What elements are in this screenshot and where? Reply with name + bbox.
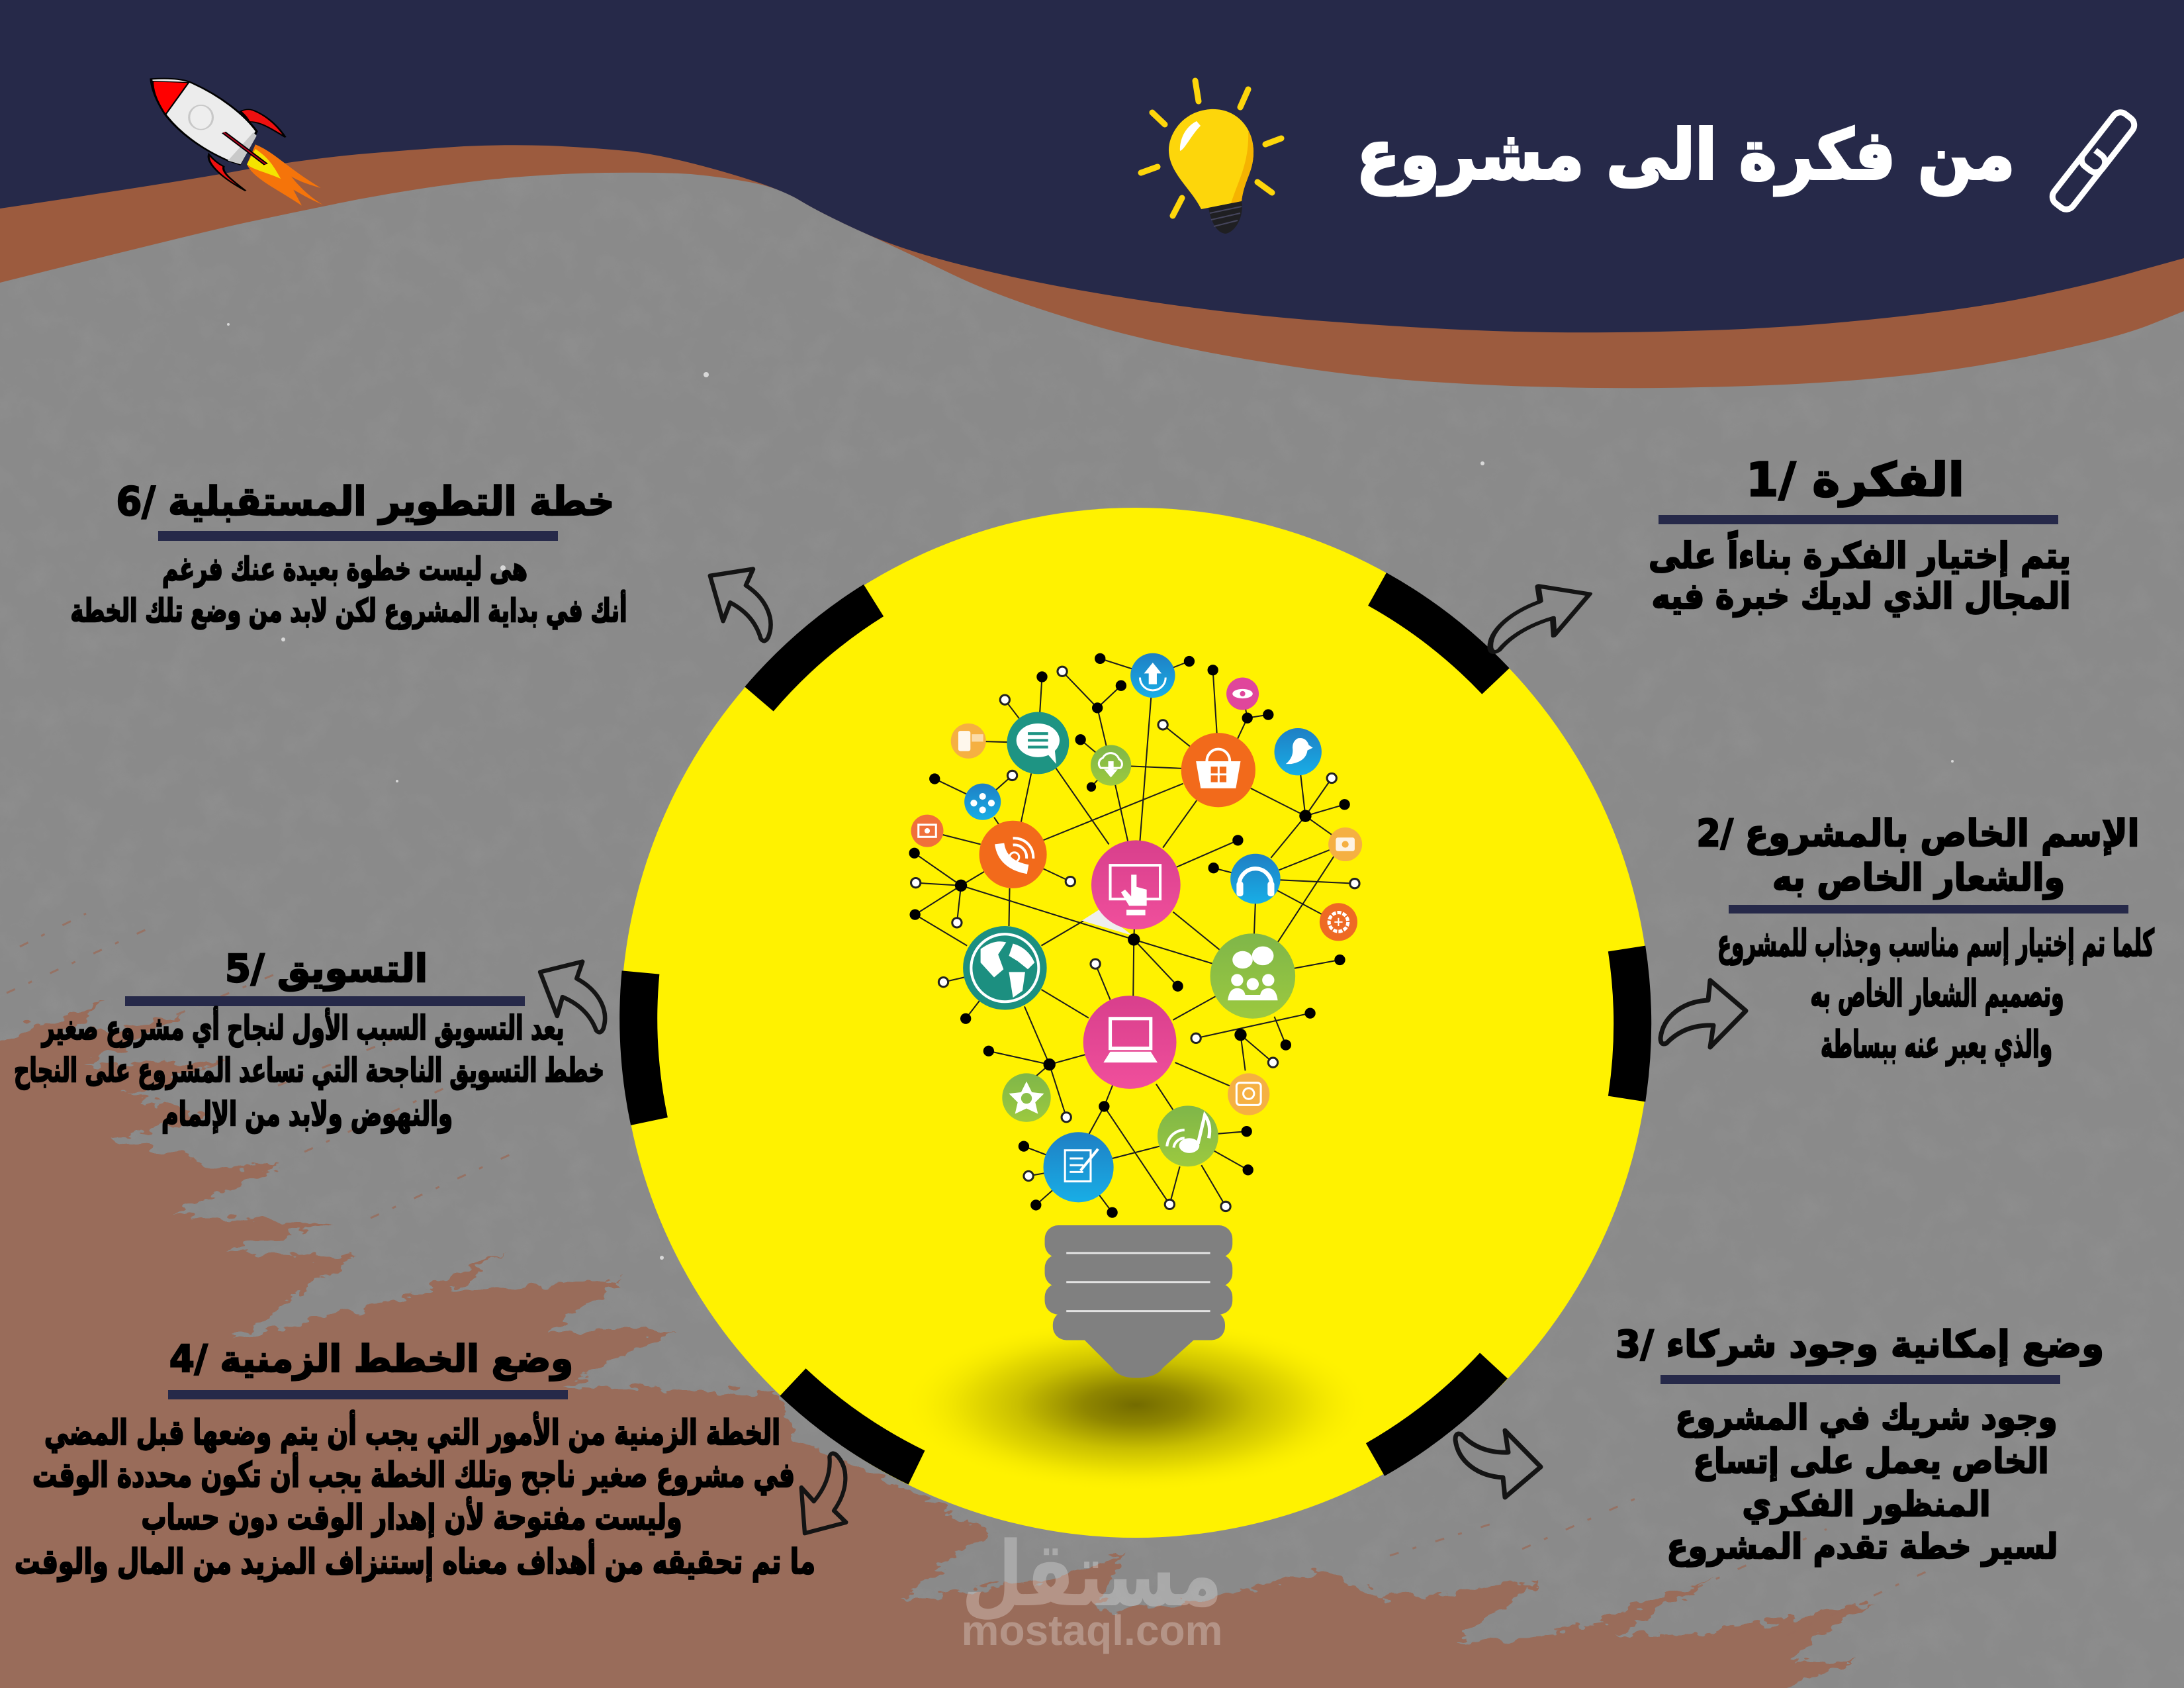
- body text 5: والنهوض ولابد من الإلمام: [161, 1095, 453, 1134]
- icon: laptop: [1083, 996, 1177, 1089]
- icon: camera orange: [911, 815, 944, 847]
- watermark: mostaql.com: [961, 1607, 1223, 1654]
- icon: headphones: [1230, 854, 1281, 904]
- icon: phone: [979, 821, 1047, 888]
- network lines: [915, 659, 1355, 1213]
- arrow 1: [1477, 572, 1598, 655]
- icon: light bulb: [1141, 81, 1281, 234]
- icon: network flow: [964, 784, 1001, 820]
- body text 5: خطط التسويق الناجحة التي تساعد المشروع على النجاح: [14, 1051, 604, 1090]
- body text 6: هى ليست خطوة بعيدة عنك فرغم: [162, 551, 527, 588]
- arrow 5: [526, 947, 625, 1036]
- heading 5: التسويق /5: [225, 946, 428, 992]
- arrow 6: [694, 552, 794, 645]
- panel: step 1 idea: [1477, 453, 2071, 655]
- arrow 4: [780, 1450, 875, 1549]
- icon: notebook: [1044, 1132, 1114, 1202]
- watermark: مستقل: [961, 1523, 1223, 1626]
- heading 6: خطة التطوير المستقبلية /6: [116, 479, 614, 525]
- icon: gear: [1320, 903, 1357, 941]
- body text 2: [1717, 922, 2154, 1066]
- title: من فكرة الى مشروع: [1357, 115, 2015, 196]
- icon: location tag: [1228, 1073, 1269, 1115]
- watermark: [961, 1523, 1223, 1654]
- body text 5: [14, 1006, 604, 1134]
- icon: photo camera: [1328, 827, 1362, 861]
- heading 2: والشعار الخاص به: [1772, 857, 2065, 900]
- body text 3: وجود شريك في المشروع: [1676, 1398, 2057, 1438]
- body text 4: الخطة الزمنية من الأمور التي يجب أن يتم وضعها قبل المضي: [44, 1410, 780, 1453]
- icon: bird: [1275, 728, 1322, 775]
- icon: shopping basket: [1181, 733, 1255, 807]
- panel: step 6 future plan: [70, 479, 794, 645]
- black ring segments: [639, 589, 1633, 1468]
- white ring nodes: [911, 667, 1359, 1211]
- central yellow circle: [621, 508, 1651, 1538]
- body text 4: [15, 1410, 815, 1582]
- panel: step 5 marketing: [14, 946, 625, 1134]
- icon: upload: [1130, 653, 1175, 698]
- header band: brown wave: [0, 0, 2184, 388]
- body text 4: ما تم تحقيقه من أهداف معناه إستنزاف المزيد من المال والوقت: [15, 1539, 815, 1582]
- heading 3: وضع إمكانية وجود شركاء /3: [1615, 1323, 2104, 1366]
- bulb base: [1045, 1225, 1232, 1378]
- body text 4: وليست مفتوحة لأن إهدار الوقت دون حساب: [142, 1496, 682, 1538]
- body text 6: أنك في بداية المشروع لكن لابد من وضع تلك الخطة: [70, 590, 627, 630]
- icon: chain link: [2049, 109, 2138, 212]
- body text 5: يعد التسويق السبب الأول لنجاح أي مشروع صغير: [41, 1006, 564, 1048]
- body text 3: لسير خطة تقدم المشروع: [1666, 1527, 2058, 1567]
- icon: star: [1002, 1073, 1051, 1122]
- heading 2: الإسم الخاص بالمشروع /2: [1697, 812, 2139, 855]
- arrow 2: [1661, 980, 1746, 1047]
- panel: step 4 timeline: [15, 1338, 875, 1582]
- icon: chat: [1007, 712, 1069, 774]
- brown brush stroke at the bottom: [0, 914, 1933, 1688]
- icon: globe: [963, 926, 1047, 1010]
- body text 3: المنظور الفكري: [1742, 1485, 1991, 1524]
- body text 1: يتم إختيار الفكرة بناءاً على: [1649, 530, 2071, 577]
- arrow 3: [1455, 1430, 1541, 1497]
- icon: video: [951, 724, 986, 759]
- icon: rocket: [151, 79, 323, 206]
- icon: cloud download: [1091, 745, 1131, 786]
- icon: music note: [1158, 1105, 1218, 1166]
- icon: people talking: [1210, 933, 1295, 1019]
- heading 1: الفكرة /1: [1746, 453, 1964, 507]
- icon: touch screen: [1091, 840, 1181, 929]
- body text 6: [70, 551, 627, 630]
- body text 1: [1649, 530, 2071, 617]
- body text 3: الخاص يعمل على إتساع: [1693, 1442, 2049, 1481]
- body text 4: في مشروع صغير ناجح وتلك الخطة يجب أن تكون محددة الوقت: [32, 1452, 795, 1495]
- panel: step 2 name and logo: [1661, 812, 2154, 1066]
- icon: eye: [1226, 677, 1259, 710]
- black nodes: [909, 653, 1350, 1218]
- illustration: idea bulb network: [899, 653, 1372, 1493]
- heading 4: وضع الخطط الزمنية /4: [169, 1338, 573, 1381]
- body text 3: [1666, 1398, 2058, 1567]
- header band: navy wave: [0, 0, 2184, 332]
- body text 1: المجال الذي لديك خبرة فيه: [1652, 575, 2070, 617]
- panel: step 3 partners: [1455, 1323, 2104, 1567]
- heading 2: [1697, 812, 2139, 900]
